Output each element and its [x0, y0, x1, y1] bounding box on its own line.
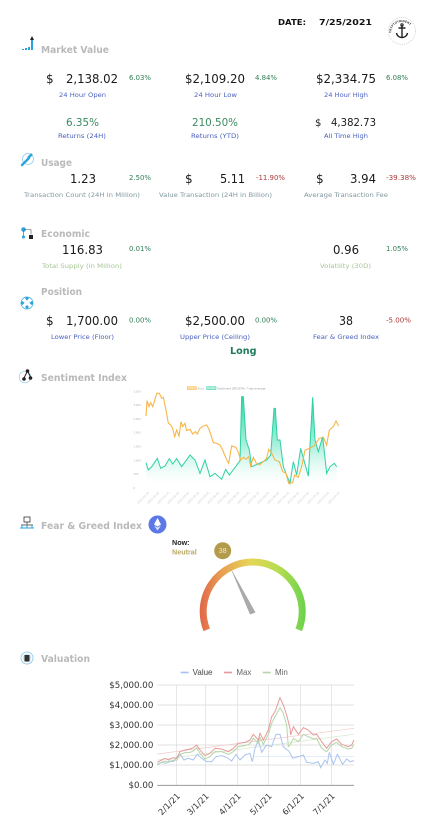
metric: average transaction fee: [304, 172, 416, 199]
y axis labels: $1,000.00: [109, 761, 153, 771]
metric: returns 24h: [58, 117, 106, 140]
x axis date labels: 2021-07-14: [306, 491, 320, 505]
metric: all time high: 4,382.73: [331, 117, 376, 129]
metric: lower price: $: [46, 314, 54, 328]
x axis labels: 3/1/21: [185, 791, 211, 817]
metric: upper price: [180, 314, 277, 341]
x axis date labels: 2021-02-24: [166, 491, 180, 505]
metric: lower price: [46, 314, 151, 341]
metric: transaction count: 2.50%: [129, 174, 151, 182]
x axis labels: 7/1/21: [311, 791, 337, 817]
panel: sentiment index: [19, 369, 341, 505]
logo: anchor badge: CRYPTOTRIDENT: [389, 20, 412, 33]
y axis labels: 0: [133, 486, 135, 490]
metric: 24 hour high: $2,334.75: [316, 72, 376, 86]
metric: fear and greed: -5.00%: [386, 316, 411, 324]
x axis labels: 6/1/21: [280, 791, 306, 817]
icon: network triangle: [19, 369, 32, 383]
metric: volatility: 0.96: [333, 243, 359, 257]
heading: valuation: Valuation: [41, 654, 90, 665]
y axis labels: $5,000.00: [109, 681, 153, 691]
x axis date labels: 2021-06-04: [266, 491, 280, 505]
metric: 24 hour open: 2,138.02: [66, 72, 118, 86]
heading: position: Position: [41, 287, 82, 298]
metric: upper price: $2,500.00: [185, 314, 245, 328]
chart legend: Max: [236, 668, 251, 677]
x axis date labels: 2021-03-06: [176, 491, 190, 505]
max line: [157, 698, 354, 762]
metric: transaction count: 1.23: [70, 172, 96, 186]
metric: total supply: 116.83: [62, 243, 103, 257]
metric: fear and greed: 38: [339, 314, 353, 328]
panel: market value: [22, 36, 408, 140]
y axis labels: $3,000.00: [109, 721, 153, 731]
panel: position: [20, 287, 411, 357]
panel: fear and greed index: [20, 516, 302, 630]
metric: lower price: 1,700.00: [66, 314, 118, 328]
gauge label: Now:: [172, 538, 190, 547]
grid: [157, 685, 354, 786]
gauge value badge: 38: [219, 548, 227, 555]
metric: volatility: Volatility (30D): [320, 262, 371, 270]
gauge label: [172, 538, 197, 556]
y axis labels: 1,500: [133, 445, 141, 449]
sentiment line: [146, 397, 337, 483]
metric: 24 hour open: 24 Hour Open: [59, 91, 106, 99]
y axis labels: [133, 389, 141, 490]
metric: value transaction: $: [185, 172, 193, 186]
heading: usage: Usage: [41, 158, 72, 169]
x axis date labels: 2021-04-05: [206, 491, 220, 505]
sentiment area: [146, 397, 337, 484]
y axis labels: $2,000.00: [109, 741, 153, 751]
heading: market value: Market Value: [41, 45, 109, 56]
metric: total supply: [41, 243, 151, 270]
gauge label: Neutral: [172, 548, 197, 556]
gauge needle: [230, 567, 256, 614]
gauge value badge: [214, 542, 231, 559]
x axis date labels: 2021-07-20: [316, 491, 330, 505]
y axis labels: 2,000: [133, 431, 141, 435]
y axis labels: $0.00: [129, 781, 153, 791]
metric: total supply: Total Supply (in Million): [41, 262, 122, 270]
chart legend: [187, 386, 266, 390]
x axis date labels: 2021-04-25: [226, 491, 240, 505]
x axis labels: [156, 791, 337, 817]
chart legend: Value: [193, 668, 213, 677]
metric: 24 hour low: 4.84%: [255, 74, 277, 82]
chart: value max min: [109, 668, 354, 817]
metric: returns ytd: [191, 117, 239, 140]
x axis labels: 2/1/21: [156, 791, 182, 817]
date: DATE:: [278, 18, 306, 27]
y axis labels: 3,500: [133, 389, 141, 393]
y axis labels: 2,500: [133, 417, 141, 421]
value line: [157, 734, 354, 768]
metric: total supply: 0.01%: [129, 245, 151, 253]
chart legend: Price: [198, 386, 205, 390]
gauge arc: [203, 562, 302, 630]
x axis date labels: 2021-04-15: [216, 491, 230, 505]
icon: database rings: [21, 652, 33, 664]
heading: sentiment index: Sentiment Index: [41, 373, 128, 384]
chart legend: [181, 668, 288, 677]
x axis date labels: 2021-03-26: [196, 491, 210, 505]
chart legend: Min: [275, 668, 288, 677]
x axis date labels: 2021-05-15: [246, 491, 260, 505]
metric: transaction count: [23, 172, 151, 199]
icon: ethereum: [148, 516, 166, 534]
x axis date labels: 2021-07-25: [327, 491, 341, 505]
y axis labels: 500: [133, 472, 139, 476]
metric: 24 hour low: [185, 72, 277, 99]
metric: all time high: All Time High: [324, 132, 368, 140]
panel: valuation: [21, 652, 354, 817]
icon: institution: [20, 517, 34, 528]
metric: returns 24h: Returns (24H): [58, 132, 106, 140]
metric: volatility: [320, 243, 408, 270]
x axis date labels: 2021-01-25: [136, 491, 150, 505]
x axis date labels: 2021-06-24: [286, 491, 300, 505]
metric: average transaction fee: $: [316, 172, 324, 186]
x axis date labels: 2021-02-14: [156, 491, 170, 505]
metric: 24 hour high: 6.08%: [386, 74, 408, 82]
metric: all time high: [315, 117, 376, 140]
metric: volatility: 1.05%: [386, 245, 408, 253]
trend lines: [157, 728, 354, 760]
x axis labels: 5/1/21: [248, 791, 274, 817]
icon: circular nodes: [20, 296, 34, 309]
icon: wrench: [22, 154, 34, 165]
metric: transaction count: Transaction Count (24H in Million): [23, 191, 140, 199]
metric: all time high: $: [315, 118, 321, 129]
metric: average transaction fee: Average Transaction Fee: [304, 191, 388, 199]
panel: usage: [22, 154, 416, 199]
metric: 24 hour high: [316, 72, 408, 99]
date: 7/25/2021: [319, 18, 373, 27]
metric: upper price: Upper Price (Ceiling): [180, 333, 250, 341]
metric: fear and greed: [313, 314, 411, 341]
metric: average transaction fee: 3.94: [350, 172, 376, 186]
metric: returns 24h: 6.35%: [66, 117, 99, 129]
metric: value transaction: [159, 172, 285, 199]
x axis date labels: 2021-03-16: [186, 491, 200, 505]
metric: value transaction: -11.90%: [256, 174, 285, 182]
logo: anchor badge: [388, 17, 416, 45]
heading: fear and greed index: Fear & Greed Index: [41, 521, 143, 532]
chart legend: Sentiment (BTC/ETH) 7-day average: [217, 386, 266, 390]
metric: value transaction: Value Transaction (24H in Billion): [159, 191, 272, 199]
metric: 24 hour high: 24 Hour High: [324, 91, 368, 99]
x axis date labels: 2021-02-04: [146, 491, 160, 505]
min line: [157, 708, 354, 765]
metric: lower price: 0.00%: [129, 316, 151, 324]
metric: lower price: Lower Price (Floor): [51, 333, 114, 341]
date: [278, 18, 373, 27]
x axis date labels: 2021-06-14: [276, 491, 290, 505]
metric: upper price: 0.00%: [255, 316, 277, 324]
metric: 24 hour open: $: [46, 72, 54, 86]
y axis labels: [109, 681, 153, 791]
metric: 24 hour open: [46, 72, 151, 99]
chart: sentiment vs price: [133, 386, 341, 505]
metric: value transaction: 5.11: [220, 172, 245, 186]
metric: returns ytd: 210.50%: [192, 117, 238, 129]
metric: 24 hour low: 24 Hour Low: [194, 91, 237, 99]
icon: growth chart: [22, 36, 34, 50]
x axis date labels: 2021-05-05: [236, 491, 250, 505]
y axis labels: $4,000.00: [109, 701, 153, 711]
signal: long: Long: [230, 346, 256, 357]
metric: 24 hour open: 6.03%: [129, 74, 151, 82]
metric: 24 hour low: $2,109.20: [185, 72, 245, 86]
metric: returns ytd: Returns (YTD): [191, 132, 239, 140]
heading: economic: Economic: [41, 229, 90, 240]
x axis labels: 4/1/21: [217, 791, 243, 817]
price line: [146, 393, 339, 483]
y axis labels: 3,000: [133, 403, 141, 407]
x axis date labels: 2021-07-04: [296, 491, 310, 505]
icon: flow nodes: [21, 227, 33, 239]
panel: economic: [21, 227, 408, 270]
metric: average transaction fee: -39.38%: [386, 174, 416, 182]
metric: fear and greed: Fear & Greed Index: [313, 333, 379, 341]
x axis date labels: [136, 491, 341, 505]
x axis date labels: 2021-05-25: [256, 491, 270, 505]
y axis labels: 1,000: [133, 459, 141, 463]
